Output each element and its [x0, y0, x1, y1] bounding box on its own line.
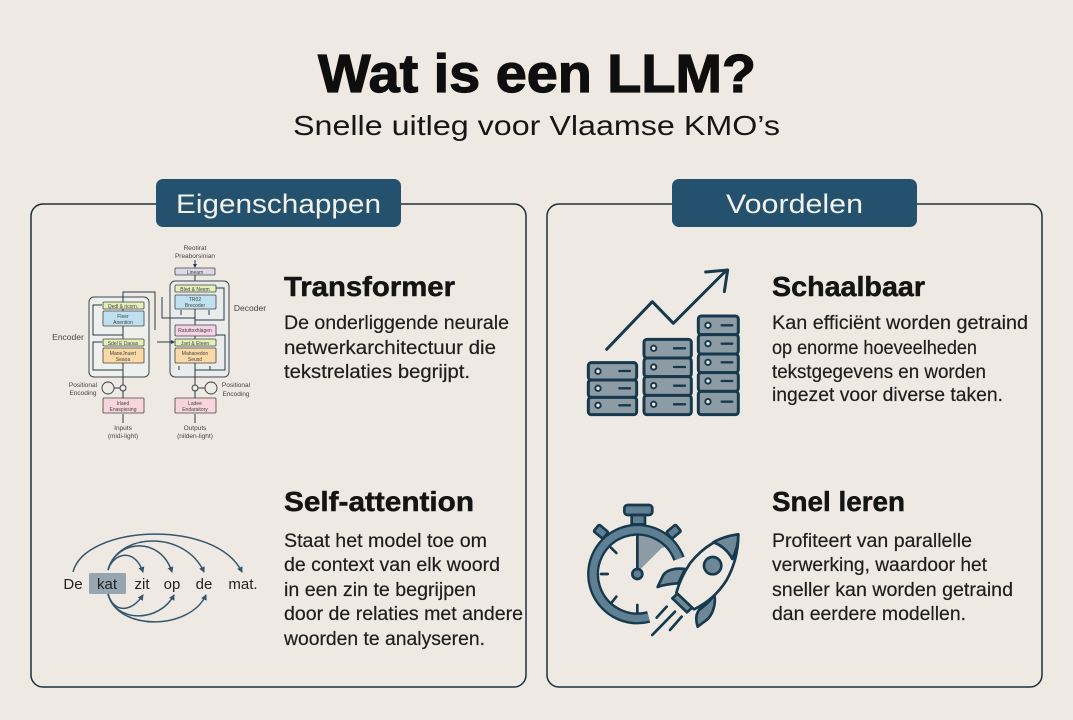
- subtitle: Snelle uitleg voor Vlaamse KMO’s: [293, 110, 780, 141]
- icon: server stacks with growth arrow: [588, 270, 738, 415]
- decoder blocks: Ladee: [188, 401, 202, 407]
- decoder blocks: Mahaoedon: [182, 351, 208, 357]
- title: Wat is een LLM?: [318, 44, 756, 104]
- tab: Voordelen: [672, 179, 917, 227]
- tab: Eigenschappen: Eigenschappen: [176, 189, 381, 219]
- text: Self-attention description: in een zin te begrijpen: [284, 580, 476, 601]
- text: Schaalbaar description: ingezet voor diverse taken.: [772, 385, 1003, 406]
- diagram: transformer architecture: Encoding: [69, 390, 97, 397]
- text: Self-attention description: [283, 531, 523, 650]
- diagram: transformer architecture: [52, 245, 266, 440]
- diagram: self-attention sentence: [63, 534, 258, 622]
- diagram: transformer architecture: Reotirat: [184, 245, 207, 252]
- text: Snel leren description: [772, 531, 1013, 625]
- heading: Snel leren: Snel leren: [772, 486, 905, 517]
- decoder blocks: Seusd: [188, 357, 202, 363]
- text: Snel leren description: dan eerdere modellen.: [772, 604, 966, 625]
- text: Snel leren description: Profiteert van parallelle: [772, 531, 972, 552]
- text: Transformer description: De onderliggende neurale: [284, 313, 509, 334]
- text: Schaalbaar description: tekstgegevens en worden: [772, 362, 986, 383]
- text: Transformer description: tekstrelaties begrijpt.: [284, 362, 470, 383]
- diagram: transformer architecture: Encoding: [222, 391, 250, 398]
- panel: Voordelen: [547, 179, 1042, 687]
- encoder blocks: ManeJnuert: [110, 351, 137, 357]
- text: Self-attention description: de context van elk woord: [284, 555, 500, 576]
- diagram: transformer architecture: (midi-light): [108, 433, 138, 440]
- encoder blocks: Irlaed: [117, 401, 129, 407]
- tab: Voordelen: Voordelen: [726, 189, 863, 219]
- text: Self-attention description: woorden te analyseren.: [283, 629, 485, 650]
- diagram: transformer architecture: (nilden-light): [177, 433, 213, 440]
- panel frame: Voordelen: [547, 204, 1042, 687]
- panel frame: Eigenschappen: [31, 204, 526, 687]
- diagram: transformer architecture: Encoder: [52, 332, 84, 342]
- diagram: transformer architecture: Positional: [222, 382, 251, 389]
- text: Snel leren description: verwerking, waardoor het: [772, 555, 988, 576]
- text: Self-attention description: door de relaties met andere: [284, 604, 523, 625]
- connector lines: [93, 288, 225, 423]
- decoder blocks: [175, 285, 216, 413]
- text: Self-attention description: Staat het model toe om: [284, 531, 487, 552]
- text: Snel leren description: sneller kan worden getraind: [772, 580, 1013, 601]
- encoder blocks: [103, 302, 144, 413]
- diagram: self-attention sentence: de: [196, 576, 212, 593]
- panel: Eigenschappen: [31, 179, 526, 687]
- encoder blocks: Sdel E Daoas: [108, 341, 139, 347]
- encoder blocks: Anention: [113, 320, 133, 326]
- text: Transformer description: netwerkarchitectuur die: [284, 338, 496, 359]
- decoder blocks: Jset & Eteen: [181, 341, 209, 347]
- diagram: transformer architecture: Lineam: [187, 270, 203, 276]
- decoder blocks: Endaraitory: [182, 407, 208, 413]
- decoder blocks: Brecoder: [185, 303, 205, 309]
- decoder blocks: Ratuttoxhlagen: [178, 328, 212, 334]
- text: Schaalbaar description: [772, 313, 1028, 406]
- icon: stopwatch and rocket: [593, 505, 738, 635]
- decoder blocks: Bled & Neem: [180, 287, 210, 293]
- encoder blocks: Qedl & ricorn.: [108, 304, 138, 310]
- heading: Schaalbaar: Schaalbaar: [772, 271, 925, 302]
- text: Schaalbaar description: Kan efficiënt worden getraind: [772, 313, 1028, 334]
- text: Schaalbaar description: op enorme hoeveelheden: [772, 338, 977, 359]
- diagram: transformer architecture: Outputs: [184, 425, 207, 432]
- diagram: transformer architecture: Inputs: [114, 425, 133, 432]
- diagram: transformer architecture: Decoder: [234, 303, 266, 313]
- heading: Transformer: Transformer: [284, 271, 455, 302]
- diagram: self-attention sentence: op: [164, 576, 180, 593]
- diagram: self-attention sentence: kat: [97, 576, 118, 593]
- heading: Self-attention: Self-attention: [284, 486, 474, 517]
- encoder blocks: Enaspissing: [110, 407, 137, 413]
- decoder blocks: TR02: [189, 297, 201, 303]
- text: Transformer description: [284, 313, 509, 383]
- diagram: transformer architecture: Preaborsinian: [175, 253, 215, 260]
- diagram: self-attention sentence: De: [63, 576, 83, 593]
- diagram: self-attention sentence: zit: [134, 576, 150, 593]
- diagram: self-attention sentence: mat.: [228, 576, 258, 593]
- diagram: transformer architecture: Positional: [69, 382, 98, 389]
- encoder blocks: Seaoa: [116, 357, 130, 363]
- encoder blocks: Fleer: [117, 314, 129, 320]
- tab: Eigenschappen: [156, 179, 401, 227]
